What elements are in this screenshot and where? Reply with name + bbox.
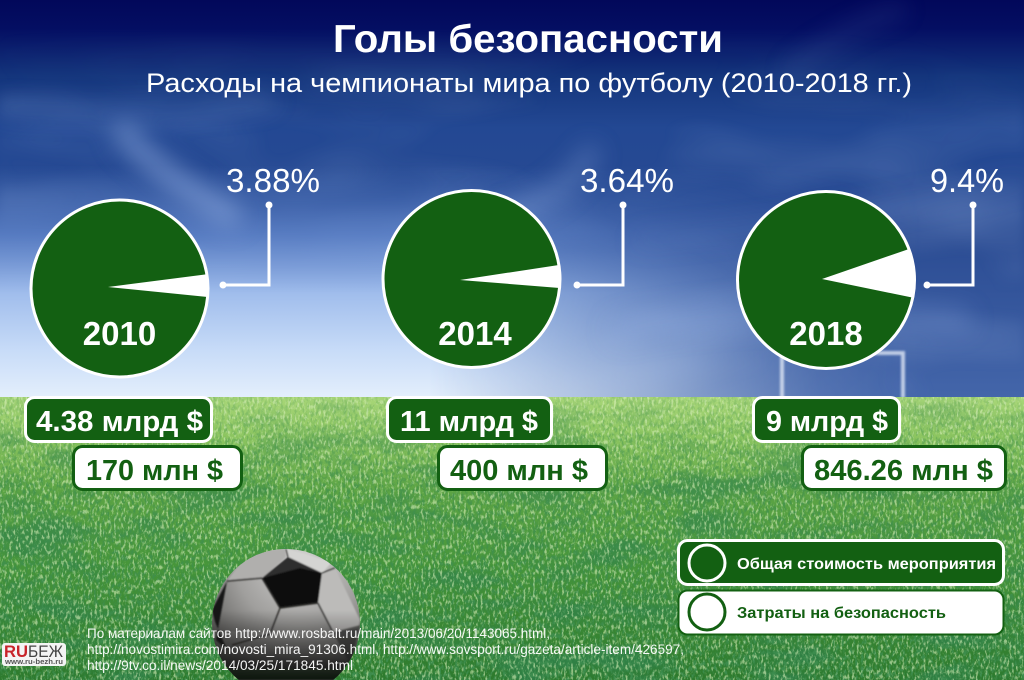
pie chart 2018: 2018	[789, 315, 863, 352]
security cost 2010	[74, 446, 242, 490]
panel: 2018	[738, 162, 1006, 490]
pie chart 2018	[738, 192, 915, 368]
logo: RUБЕЖ: www.ru-bezh.ru	[4, 657, 63, 666]
total cost 2014	[388, 398, 552, 442]
callout 3.64%: 3.64%	[580, 162, 674, 199]
soccer ball	[212, 549, 360, 680]
logo: RUБЕЖ	[2, 642, 66, 666]
callout 3.88%: 3.88%	[226, 162, 320, 199]
logo: RUБЕЖ: БЕЖ	[28, 642, 63, 661]
security cost 2014	[438, 446, 606, 490]
legend item: total cost	[678, 540, 1004, 584]
source text: http://novostimira.com/novosti_mira_91306.html, http://www.sovsport.ru/gazeta/article-item/426597,	[87, 642, 684, 657]
background: sky	[0, 0, 1024, 400]
callout 3.88%	[220, 162, 320, 288]
pie chart 2010: 2010	[83, 315, 156, 352]
callout 3.64%	[574, 162, 674, 288]
legend item: total cost: Общая стоимость мероприятия	[737, 556, 996, 573]
callout 9.4%: 9.4%	[930, 162, 1004, 199]
pie chart 2010	[31, 200, 208, 377]
logo: RUБЕЖ: RU	[4, 642, 28, 661]
total cost 2018: 9 млрд $	[766, 406, 888, 438]
security cost 2010: 170 млн $	[86, 455, 223, 487]
security cost 2014: 400 млн $	[450, 455, 588, 487]
total cost 2014: 11 млрд $	[400, 406, 538, 438]
source text: http://9tv.co.il/news/2014/03/25/171845.html	[87, 658, 353, 673]
source text	[87, 626, 684, 673]
security cost 2018: 846.26 млн $	[814, 455, 993, 487]
pie chart 2014: 2014	[438, 315, 512, 352]
background: grass field	[0, 397, 1024, 680]
panel: 2010	[26, 162, 320, 490]
legend	[678, 540, 1004, 634]
legend item: security cost: Затраты на безопасность	[737, 605, 946, 622]
legend item: security cost	[678, 590, 1004, 634]
security cost 2018	[802, 446, 1006, 490]
total cost 2010	[26, 398, 212, 442]
total cost 2018	[754, 398, 900, 442]
panel: 2014	[383, 162, 674, 490]
subtitle: Расходы на чемпионаты мира по футболу (2010-2018 гг.)	[146, 68, 912, 98]
pie chart 2014	[383, 190, 560, 368]
source text: По материалам сайтов http://www.rosbalt.ru/main/2013/06/20/1143065.html,	[87, 626, 550, 641]
callout 9.4%	[924, 162, 1004, 288]
goal frame	[782, 353, 903, 398]
title: Голы безопасности	[333, 18, 723, 61]
total cost 2010: 4.38 млрд $	[36, 406, 203, 438]
